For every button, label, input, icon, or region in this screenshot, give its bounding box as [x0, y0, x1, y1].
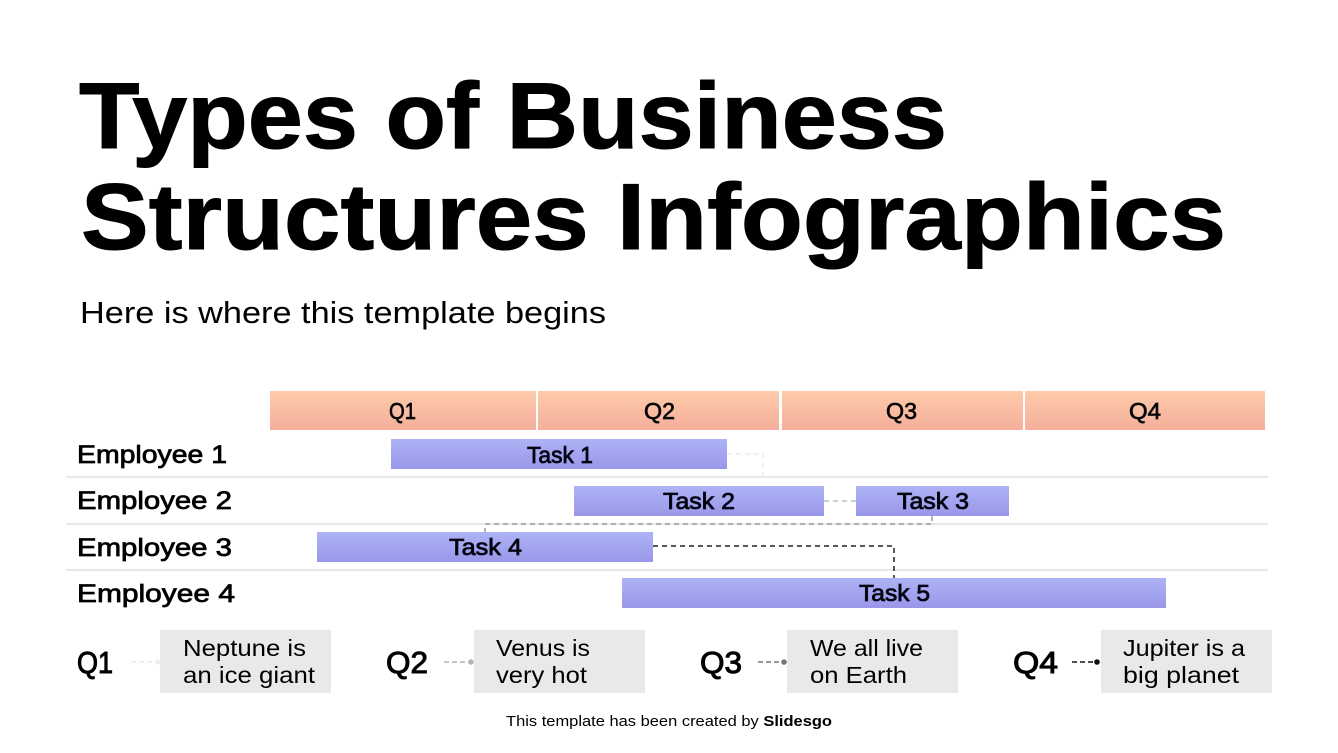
- legend: Q1: an ice giant: [183, 662, 316, 688]
- legend: Q2: [386, 630, 645, 693]
- legend: Q3: [700, 630, 958, 693]
- task 5: Task 5: [859, 580, 930, 606]
- legend: Q1: [77, 630, 331, 693]
- employee labels: Employee 4: [77, 580, 235, 608]
- quarter header row: [270, 391, 1265, 430]
- employee labels: Employee 3: [77, 534, 232, 562]
- task 3: Task 3: [897, 488, 969, 514]
- quarter header row: Q3: [886, 398, 917, 424]
- footer credit: This template has been created by Slidesgo: [506, 713, 832, 730]
- legend: Q4: Q4: [1013, 645, 1058, 680]
- title: Types of Business: [79, 63, 947, 168]
- task 4: Task 4: [449, 534, 522, 560]
- task 2: Task 2: [663, 488, 735, 514]
- task 1: Task 1: [527, 442, 593, 468]
- task 5: [622, 578, 1166, 608]
- dependency connectors: [485, 454, 932, 578]
- subtitle: Here is where this template begins: [80, 295, 606, 330]
- legend: Q1: Q1: [77, 645, 113, 680]
- quarter header row: Q2: [644, 398, 675, 424]
- title: Structures Infographics: [81, 164, 1226, 269]
- employee labels: Employee 1: [77, 441, 227, 469]
- legend: Q4: [1013, 630, 1272, 693]
- legend: Q1: Neptune is: [183, 635, 306, 661]
- legend: Q2: Q2: [386, 645, 428, 680]
- task 4: [317, 532, 653, 562]
- legend: Q4: big planet: [1123, 662, 1240, 688]
- employee labels: [77, 441, 235, 608]
- legend: Q2: Venus is: [496, 635, 590, 661]
- legend: Q4: Jupiter is a: [1123, 635, 1245, 661]
- title: [79, 63, 1226, 269]
- quarter header row: Q4: [1129, 398, 1161, 424]
- employee labels: Employee 2: [77, 487, 232, 515]
- task 2: [574, 486, 824, 516]
- task 1: [391, 439, 727, 469]
- legend: Q3: We all live: [810, 635, 923, 661]
- task 3: [856, 486, 1009, 516]
- quarter header row: Q1: [389, 398, 416, 424]
- legend: Q3: on Earth: [810, 662, 907, 688]
- legend: Q2: very hot: [496, 662, 588, 688]
- legend: Q3: Q3: [700, 645, 742, 680]
- gantt chart: [66, 391, 1268, 608]
